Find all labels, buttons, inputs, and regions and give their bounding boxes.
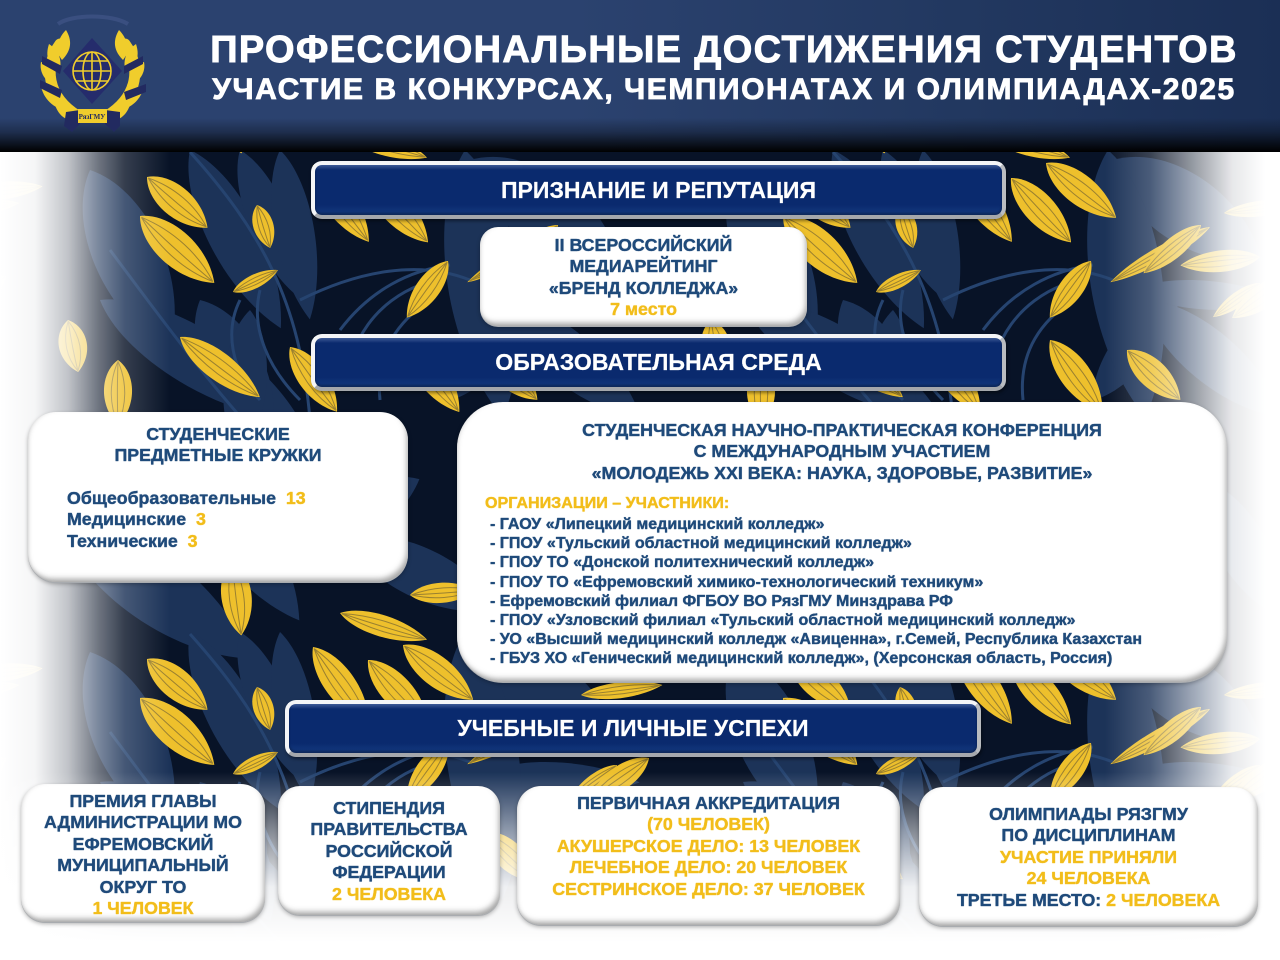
list of organizations: - ГБУЗ ХО «Генический медицинский колледж», (Херсонская область, Россия) bbox=[490, 649, 1112, 667]
panel: student subject clubs: Общеобразовательные 13 bbox=[67, 488, 306, 508]
heading band: recognition: ПРИЗНАНИЕ И РЕПУТАЦИЯ bbox=[501, 177, 816, 203]
title: ПРОФЕССИОНАЛЬНЫЕ ДОСТИЖЕНИЯ СТУДЕНТОВ bbox=[210, 29, 1238, 71]
heading band: academic and personal success bbox=[285, 700, 981, 757]
panel: head of administration award: ПРЕМИЯ ГЛАВЫ bbox=[69, 791, 217, 811]
icon: university emblem with laurel wreath bbox=[40, 14, 146, 132]
panel: olympiads: ОЛИМПИАДЫ РЯЗГМУ bbox=[989, 804, 1188, 824]
header banner bbox=[0, 0, 1280, 152]
panel: head of administration award bbox=[21, 784, 265, 922]
panel: student subject clubs: СТУДЕНЧЕСКИЕ bbox=[146, 424, 290, 444]
panel: media rating: II ВСЕРОССИЙСКИЙ bbox=[555, 235, 732, 255]
panel: head of administration award: МУНИЦИПАЛЬНЫЙ bbox=[57, 855, 229, 875]
panel: government scholarship: 2 ЧЕЛОВЕКА bbox=[332, 884, 446, 904]
panel: primary accreditation: ПЕРВИЧНАЯ АККРЕДИТАЦИЯ bbox=[577, 793, 840, 813]
panel: head of administration award: ОКРУГ ТО bbox=[100, 877, 186, 897]
panel: government scholarship: СТИПЕНДИЯ bbox=[333, 798, 445, 818]
panel: student conference bbox=[457, 402, 1227, 682]
panel: olympiads: 24 ЧЕЛОВЕКА bbox=[1027, 868, 1150, 888]
heading band: academic and personal success: УЧЕБНЫЕ И ЛИЧНЫЕ УСПЕХИ bbox=[457, 715, 809, 741]
list of organizations: - ГПОУ ТО «Ефремовский химико-технологический техникум» bbox=[490, 573, 983, 591]
heading band: recognition bbox=[311, 161, 1006, 219]
panel: government scholarship: ПРАВИТЕЛЬСТВА bbox=[310, 819, 468, 839]
panel: primary accreditation bbox=[517, 786, 900, 925]
panel: head of administration award: АДМИНИСТРАЦИИ МО bbox=[44, 812, 242, 832]
panel: primary accreditation: СЕСТРИНСКОЕ ДЕЛО: 37 ЧЕЛОВЕК bbox=[552, 879, 865, 899]
panel: student subject clubs: Технические 3 bbox=[67, 531, 198, 551]
panel: primary accreditation: (70 ЧЕЛОВЕК) bbox=[647, 814, 770, 834]
list of organizations: - УО «Высший медицинский колледж «Авиценна», г.Семей, Республика Казахстан bbox=[490, 630, 1142, 648]
heading band: educational environment bbox=[311, 334, 1006, 391]
panel: student subject clubs: ПРЕДМЕТНЫЕ КРУЖКИ bbox=[114, 445, 322, 465]
panel: student subject clubs bbox=[28, 412, 408, 582]
list of organizations: - ГПОУ ТО «Донской политехнический колледж» bbox=[490, 553, 874, 571]
panel: media rating bbox=[480, 227, 807, 326]
panel: government scholarship bbox=[278, 786, 500, 915]
list of organizations: - ГПОУ «Тульский областной медицинский колледж» bbox=[490, 534, 912, 552]
panel: media rating: 7 место bbox=[610, 299, 677, 319]
panel: olympiads bbox=[919, 787, 1258, 926]
panel: student subject clubs: Медицинские 3 bbox=[67, 509, 206, 529]
list of organizations: - Ефремовский филиал ФГБОУ ВО РязГМУ Минздрава РФ bbox=[490, 592, 953, 610]
panel: primary accreditation: АКУШЕРСКОЕ ДЕЛО: 13 ЧЕЛОВЕК bbox=[557, 836, 860, 856]
panel: head of administration award: ЕФРЕМОВСКИЙ bbox=[73, 834, 213, 854]
panel: government scholarship: РОССИЙСКОЙ bbox=[325, 841, 452, 861]
heading band: educational environment: ОБРАЗОВАТЕЛЬНАЯ СРЕДА bbox=[495, 349, 822, 375]
icon: university emblem with laurel wreath: РязГМУ bbox=[79, 113, 105, 121]
panel: olympiads: ТРЕТЬЕ МЕСТО: 2 ЧЕЛОВЕКА bbox=[957, 890, 1220, 910]
panel: government scholarship: ФЕДЕРАЦИИ bbox=[332, 862, 446, 882]
panel: student conference: С МЕЖДУНАРОДНЫМ УЧАСТИЕМ bbox=[694, 441, 990, 461]
subheading: participating organizations: ОРГАНИЗАЦИИ – УЧАСТНИКИ: bbox=[485, 494, 729, 512]
list of organizations: - ГАОУ «Липецкий медицинский колледж» bbox=[490, 515, 824, 533]
subtitle: УЧАСТИЕ В КОНКУРСАХ, ЧЕМПИОНАТАХ И ОЛИМПИАДАХ-2025 bbox=[212, 73, 1236, 106]
panel: student conference: СТУДЕНЧЕСКАЯ НАУЧНО-ПРАКТИЧЕСКАЯ КОНФЕРЕНЦИЯ bbox=[582, 420, 1102, 440]
panel: olympiads: ПО ДИСЦИПЛИНАМ bbox=[1001, 825, 1176, 845]
panel: student conference: «МОЛОДЕЖЬ XXI ВЕКА: НАУКА, ЗДОРОВЬЕ, РАЗВИТИЕ» bbox=[592, 463, 1092, 483]
list of organizations: - ГПОУ «Узловский филиал «Тульский областной медицинский колледж» bbox=[490, 611, 1075, 629]
panel: media rating: МЕДИАРЕЙТИНГ bbox=[569, 256, 718, 276]
panel: primary accreditation: ЛЕЧЕБНОЕ ДЕЛО: 20 ЧЕЛОВЕК bbox=[570, 857, 847, 877]
panel: olympiads: УЧАСТИЕ ПРИНЯЛИ bbox=[1000, 847, 1177, 867]
panel: head of administration award: 1 ЧЕЛОВЕК bbox=[92, 898, 194, 918]
panel: media rating: «БРЕНД КОЛЛЕДЖА» bbox=[549, 278, 738, 298]
list of organizations bbox=[490, 515, 1142, 667]
